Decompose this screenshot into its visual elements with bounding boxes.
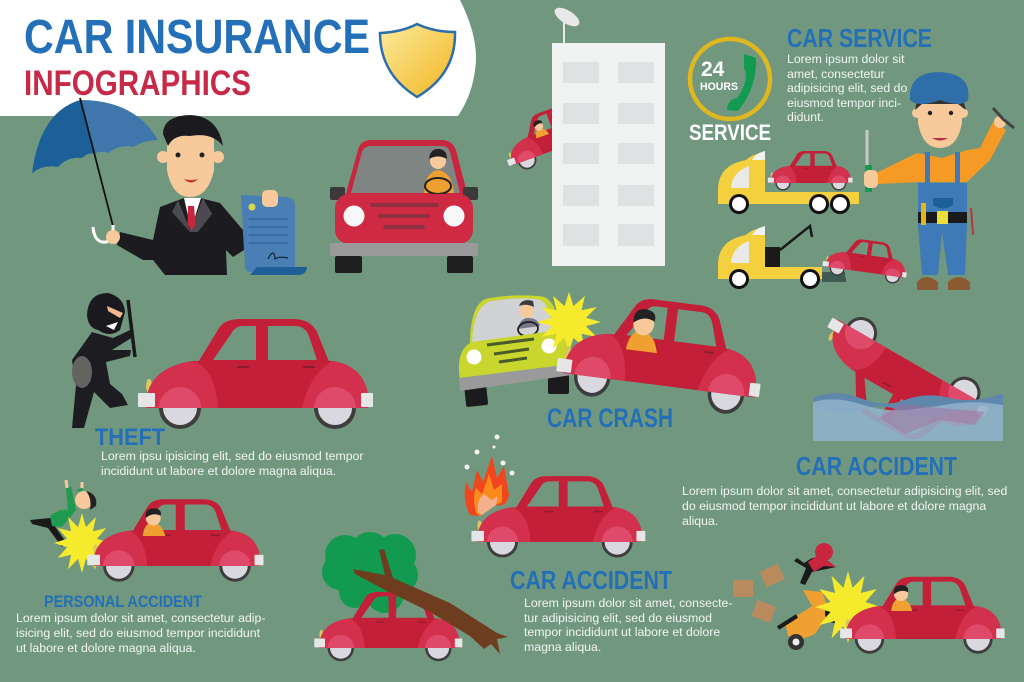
flatbed tow truck with car xyxy=(718,151,859,214)
fallen trunk xyxy=(353,549,508,654)
car crash illustration xyxy=(459,288,770,418)
title: CAR INSURANCE xyxy=(24,11,370,64)
text: car accident middle: tempor incididunt ut labore et dolore xyxy=(524,625,720,639)
thief xyxy=(72,293,135,428)
icon: 24 hours service: 24 xyxy=(701,58,725,81)
car crashing through building xyxy=(496,93,612,175)
heading: car service: CAR SERVICE xyxy=(787,23,932,53)
rider xyxy=(794,543,836,585)
icon: building with antenna xyxy=(552,4,665,266)
title panel xyxy=(0,0,476,116)
text: car accident right: Lorem ipsum dolor sit amet, consectetur adipisicing elit, sed xyxy=(682,484,1007,498)
text: theft: incididunt ut labore et dolore magna aliqua. xyxy=(101,464,336,478)
heading: theft: THEFT xyxy=(95,424,165,451)
text: theft: Lorem ipsu ipisicing elit, sed do eiusmod tempor xyxy=(101,449,363,463)
wrecker truck towing car xyxy=(718,226,911,289)
pedestrian xyxy=(30,480,96,547)
text: car accident middle: magna aliqua. xyxy=(524,640,601,654)
icon: fire xyxy=(464,434,514,516)
text: car accident right: aliqua. xyxy=(682,514,718,528)
text: car service: adipisicing elit, sed do xyxy=(787,81,907,95)
text: car service: amet, consectetur xyxy=(787,67,885,81)
icon: 24 hours service: SERVICE xyxy=(689,120,771,145)
text: car service: didunt. xyxy=(787,110,824,124)
tree canopy xyxy=(322,532,418,613)
overturned car in water xyxy=(799,303,1003,467)
yellow car xyxy=(459,295,572,407)
heading: car accident right: CAR ACCIDENT xyxy=(796,451,957,481)
icon: impact star xyxy=(815,571,881,643)
icon: boxes xyxy=(733,564,785,623)
icon: impact star xyxy=(537,292,601,352)
icon: policy document xyxy=(241,190,307,275)
text: car service: eiusmod tempor inci- xyxy=(787,96,901,110)
mechanic xyxy=(864,72,1014,290)
text: car service: Lorem ipsum dolor sit xyxy=(787,52,905,66)
icon: impact star xyxy=(54,513,110,573)
icon: shield xyxy=(380,24,455,97)
text: personal accident: isicing elit, sed do eiusmod tempor incididunt xyxy=(16,626,261,640)
front view car with driver xyxy=(330,140,478,273)
burning car xyxy=(464,434,645,558)
red car xyxy=(554,288,770,418)
businessman with policy document xyxy=(106,115,307,275)
red car with driver xyxy=(840,577,1005,654)
red car: theft xyxy=(138,319,373,429)
scooter crash illustration xyxy=(733,543,1005,654)
icon: umbrella xyxy=(32,98,158,242)
subtitle: INFOGRAPHICS xyxy=(24,64,251,103)
red car with driver xyxy=(87,499,264,582)
icon: 24 hours service xyxy=(689,39,771,145)
icon: 24 hours service: HOURS xyxy=(700,81,738,93)
scooter xyxy=(778,590,845,650)
text: car accident middle: tur adipisicing elit, sed do eiusmod xyxy=(524,611,712,625)
text: car accident middle: Lorem ipsum dolor sit amet, consecte- xyxy=(524,596,732,610)
car under fallen tree xyxy=(314,532,508,661)
text: personal accident: Lorem ipsum dolor sit amet, consectetur adip- xyxy=(16,611,265,625)
heading: personal accident: PERSONAL ACCIDENT xyxy=(44,592,203,611)
personal accident illustration xyxy=(30,480,264,582)
text: personal accident: ut labore et dolore magna aliqua. xyxy=(16,641,196,655)
heading: car accident middle: CAR ACCIDENT xyxy=(510,565,672,595)
text: car accident right: do eiusmod tempor incididunt ut labore et dolore magna xyxy=(682,499,986,513)
heading: car crash: CAR CRASH xyxy=(547,403,673,433)
